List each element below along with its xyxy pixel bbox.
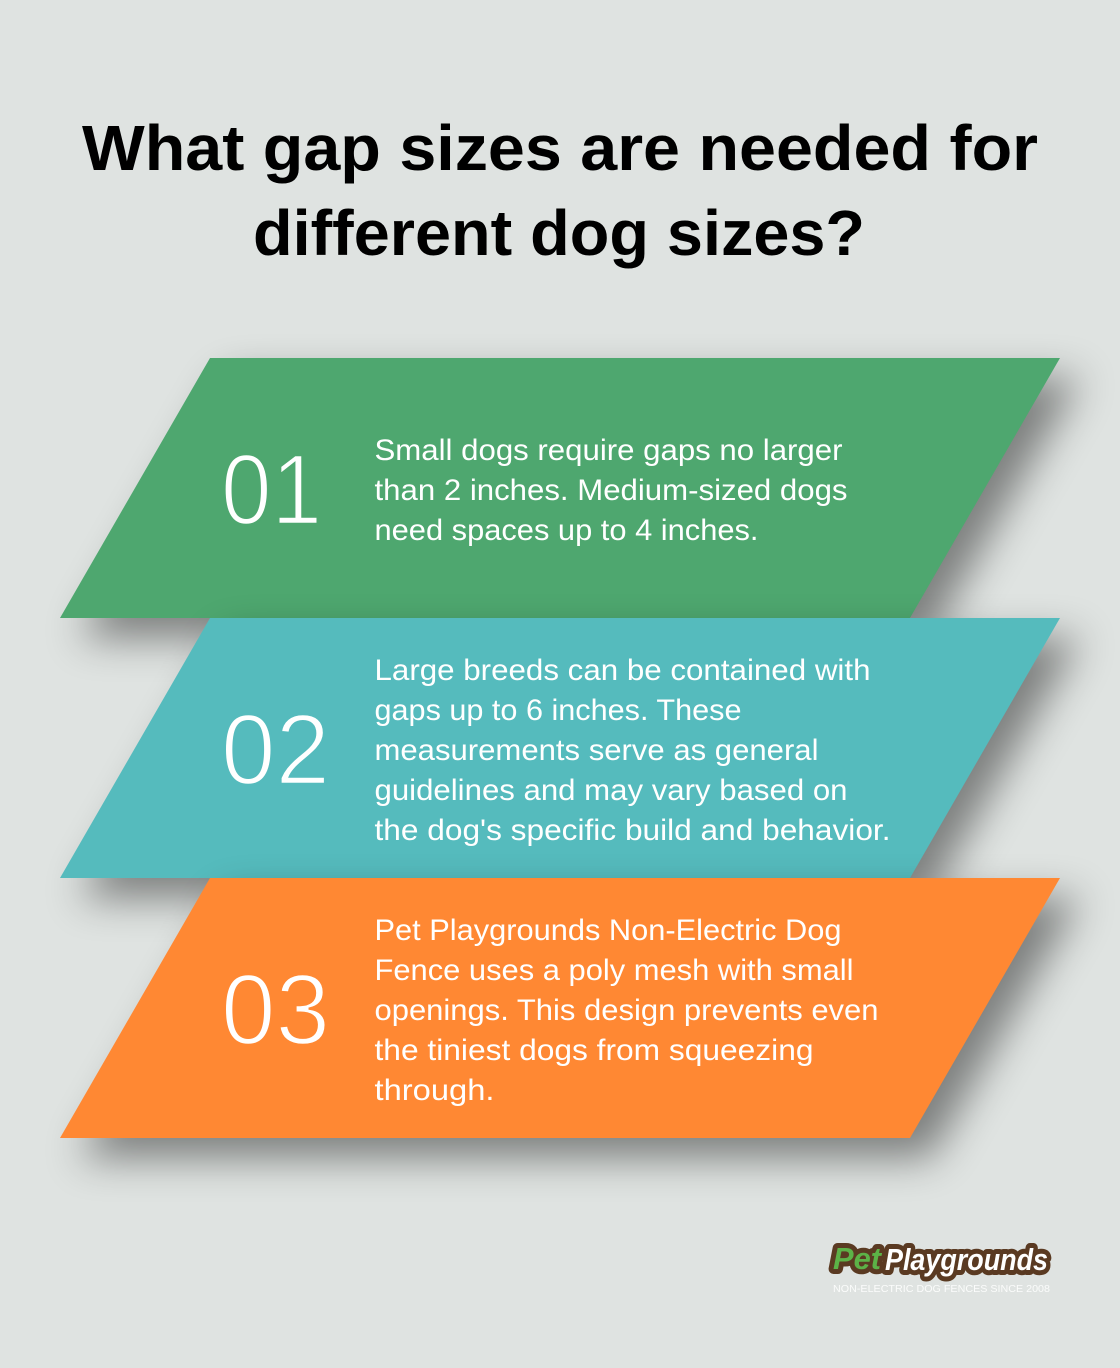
title: different dog sizes? (253, 197, 865, 269)
text: step 02: Large breeds can be contained with (374, 654, 870, 687)
number 02: 02 (221, 694, 330, 806)
text: step 03: openings. This design prevents even (374, 994, 878, 1027)
text: step 03: through. (374, 1074, 494, 1107)
band: teal (60, 618, 1060, 878)
number 01: 01 (221, 434, 322, 546)
logo: Pet Playgrounds (833, 1241, 1050, 1295)
text: step 02: the dog's specific build and behavior. (374, 814, 890, 847)
text: step 03 (374, 914, 878, 1107)
text: step 03: Pet Playgrounds Non-Electric Dog (374, 914, 842, 947)
logo tagline: NON-ELECTRIC DOG FENCES SINCE 2008 (833, 1283, 1050, 1295)
band: orange (60, 878, 1060, 1138)
text: step 01: than 2 inches. Medium-sized dogs (374, 474, 848, 507)
text: step 02: guidelines and may vary based on (374, 774, 848, 807)
logo wordmark: Pet (833, 1241, 883, 1276)
text: step 01 (374, 434, 848, 547)
panel: step 01 (60, 358, 1060, 618)
text: step 02 (374, 654, 890, 847)
text: step 03: Fence uses a poly mesh with small (374, 954, 854, 987)
logo wordmark (833, 1241, 1048, 1277)
title (82, 112, 1038, 269)
text: step 02: gaps up to 6 inches. These (374, 694, 742, 727)
panel: step 02 (60, 618, 1060, 878)
logo wordmark: Playgrounds (885, 1242, 1048, 1277)
panel: step 03 (60, 878, 1060, 1138)
text: step 03: the tiniest dogs from squeezing (374, 1034, 814, 1067)
title: What gap sizes are needed for (82, 112, 1038, 184)
text: step 02: measurements serve as general (374, 734, 818, 767)
text: step 01: Small dogs require gaps no larger (374, 434, 843, 467)
band: green (60, 358, 1060, 618)
number 03: 03 (221, 954, 330, 1066)
text: step 01: need spaces up to 4 inches. (374, 514, 758, 547)
